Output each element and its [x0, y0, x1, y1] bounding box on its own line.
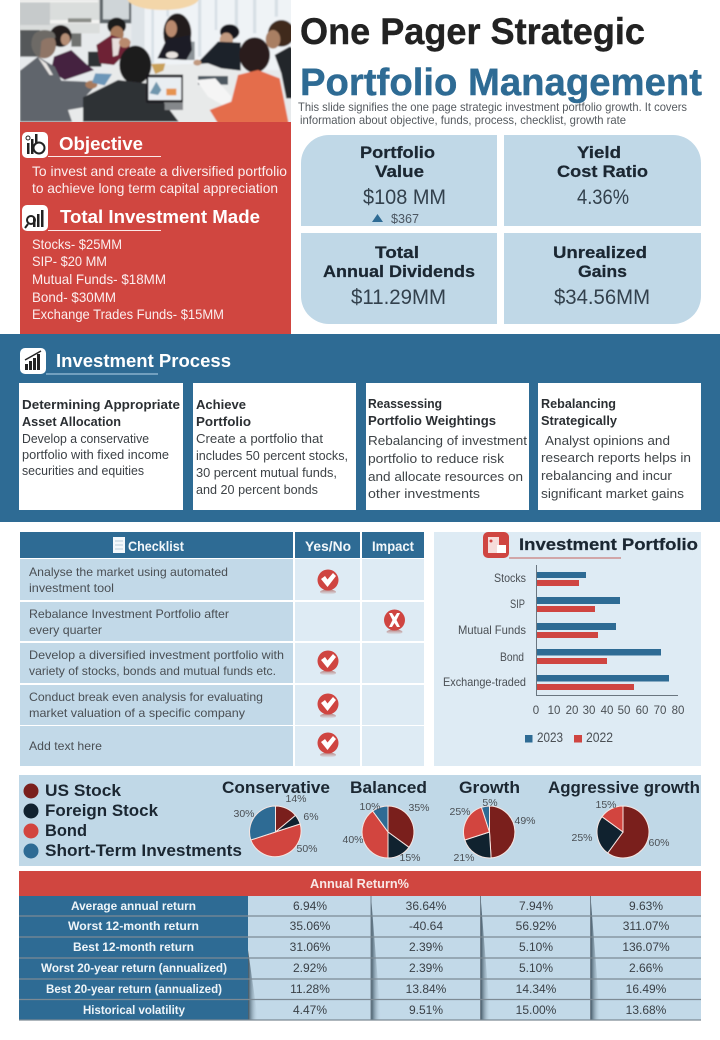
row 3: variety of stocks, bonds and mutual funds etc.	[29, 664, 276, 678]
row labels: Worst 20-year return (annualized)	[41, 961, 227, 975]
text: subtitle description	[298, 100, 687, 127]
bar chart: 50	[618, 705, 630, 717]
pie legend	[24, 781, 242, 860]
text: objective body: To invest and create a diversified portfolio	[32, 163, 287, 179]
pie: growth: Growth	[459, 778, 520, 797]
return values: 2.92%	[293, 961, 327, 975]
card: rebalancing strategically: research reports helps in	[541, 450, 691, 465]
card: asset allocation: Asset Allocation	[22, 414, 121, 429]
return values: 13.68%	[626, 1003, 667, 1017]
row 2: every quarter	[29, 623, 102, 637]
pie: growth: 21%	[453, 852, 475, 864]
return values: 136.07%	[622, 940, 670, 954]
card: asset allocation	[19, 383, 183, 510]
pie legend: Foreign Stock	[45, 801, 159, 820]
KPI: unrealized gains: $34.56MM	[554, 286, 650, 309]
return values: 2.39%	[409, 961, 443, 975]
pie: balanced: 40%	[342, 834, 364, 846]
icon: objective target chart	[22, 132, 48, 158]
pie: conservative: 30%	[233, 808, 255, 820]
KPI: unrealized gains	[504, 233, 701, 324]
heading: investment portfolio: Investment Portfolio	[519, 535, 698, 554]
KPI: yield cost ratio: Cost Ratio	[557, 162, 648, 181]
heading: objective: Objective	[59, 134, 143, 154]
return values: 11.28%	[290, 982, 330, 996]
row labels: Historical volatility	[83, 1003, 185, 1017]
table header labels	[128, 538, 414, 554]
KPI: portfolio value: Value	[375, 162, 424, 181]
KPI: unrealized gains: Unrealized	[553, 243, 647, 262]
card: achieve portfolio: Achieve	[196, 397, 246, 412]
bar chart: 80	[672, 705, 684, 717]
panel: KPI tiles	[301, 135, 701, 324]
KPI: yield cost ratio: 4.36%	[577, 186, 629, 209]
card: reassessing weightings: Reassessing	[368, 396, 442, 411]
return values: 35.06%	[290, 919, 331, 933]
photo: team meeting around a table	[18, 0, 298, 127]
KPI: portfolio value	[301, 135, 497, 226]
table header labels: Impact	[372, 538, 414, 554]
panel: asset mix pies	[19, 775, 701, 866]
card: achieve portfolio: 30 percent mutual funds,	[196, 465, 337, 480]
return values: 14.34%	[516, 982, 557, 996]
bar chart: 10	[548, 705, 560, 717]
row labels	[41, 899, 227, 1017]
return values: 2.66%	[629, 961, 663, 975]
row 5: Add text here	[29, 739, 102, 753]
KPI: unrealized gains: Gains	[578, 262, 627, 281]
KPI: total annual dividends: Total	[375, 243, 419, 262]
icon: portfolio clipboard	[483, 532, 509, 558]
bar chart: 20	[566, 705, 578, 717]
card: achieve portfolio	[193, 383, 356, 510]
pie: aggressive growth: 60%	[648, 837, 670, 849]
pie: aggressive growth: Aggressive growth	[548, 778, 700, 797]
row 2: Rebalance Investment Portfolio after	[29, 607, 229, 621]
pie: conservative: Conservative	[222, 778, 330, 797]
title: Portfolio Management	[300, 62, 702, 104]
pie: aggressive growth: 15%	[595, 799, 617, 811]
text: objective body	[32, 163, 287, 196]
list: investment amounts: SIP- $20 MM	[32, 253, 107, 269]
KPI: portfolio value: Portfolio	[360, 143, 435, 162]
row 2	[20, 602, 424, 641]
pie: growth: 25%	[449, 806, 471, 818]
pie: conservative	[222, 778, 330, 857]
row labels: Best 12-month return	[73, 940, 194, 954]
chart legend: 2023	[537, 729, 563, 745]
text: subtitle description: This slide signifies the one page strategic investment portfolio growth. It covers	[298, 100, 687, 114]
KPI: total annual dividends: Annual Dividends	[323, 262, 475, 281]
card: achieve portfolio: Create a portfolio that	[196, 431, 323, 446]
card: asset allocation: portfolio with fixed income	[22, 448, 169, 462]
row 1: investment tool	[29, 581, 114, 595]
KPI: portfolio value: $108 MM	[363, 186, 446, 209]
bar chart: 40	[601, 705, 613, 717]
list: investment amounts	[32, 236, 224, 322]
title	[300, 11, 702, 104]
KPI: total annual dividends	[301, 233, 497, 324]
row 5	[20, 726, 424, 766]
return values	[290, 899, 670, 1017]
pie: growth	[449, 778, 536, 864]
icon: red cross	[384, 610, 405, 634]
KPI: yield cost ratio	[504, 135, 701, 226]
return values: 5.10%	[519, 961, 553, 975]
return values: 2.39%	[409, 940, 443, 954]
KPI: portfolio value: $367	[391, 211, 419, 226]
card: rebalancing strategically	[538, 383, 701, 510]
pie: growth: 5%	[482, 797, 498, 809]
card: rebalancing strategically: Rebalancing	[541, 396, 616, 411]
text: objective body: to achieve long term capital appreciation	[32, 180, 278, 196]
return values: 16.49%	[626, 982, 667, 996]
title: One Pager Strategic	[300, 11, 645, 52]
row 4: market valuation of a specific company	[29, 706, 245, 720]
pie: aggressive growth: 25%	[571, 832, 593, 844]
card: rebalancing strategically: Strategically	[541, 413, 618, 428]
pie: balanced: 10%	[359, 801, 381, 813]
return values: 5.10%	[519, 940, 553, 954]
card: reassessing weightings: Portfolio Weightings	[368, 413, 496, 428]
card: achieve portfolio: Portfolio	[196, 414, 251, 429]
list: investment amounts: Mutual Funds- $18MM	[32, 271, 166, 287]
icon: process growth chart	[20, 348, 46, 374]
pie: growth: 49%	[514, 815, 536, 827]
bar chart: 0	[533, 705, 539, 717]
card: asset allocation: Develop a conservative	[22, 432, 149, 446]
heading: total investment made: Total Investment Made	[60, 207, 260, 227]
panel: investment process	[0, 334, 720, 522]
return values: 9.51%	[409, 1003, 443, 1017]
bar chart: 70	[654, 705, 666, 717]
row 4	[20, 685, 424, 725]
card: reassessing weightings: and allocate resources on	[368, 469, 523, 484]
return values: 9.63%	[629, 899, 663, 913]
card: achieve portfolio: and 20 percent bonds	[196, 482, 318, 497]
card: reassessing weightings	[366, 383, 529, 510]
pie: balanced: 35%	[408, 802, 430, 814]
table header labels: Yes/No	[305, 538, 351, 554]
pie legend: Bond	[45, 821, 87, 840]
pie: conservative: 50%	[296, 843, 318, 855]
chart legend: 2022	[586, 729, 613, 745]
card: asset allocation: securities and equities	[22, 464, 144, 478]
card: reassessing weightings: portfolio to reduce risk	[368, 451, 505, 466]
row 1	[20, 559, 424, 600]
return values: 4.47%	[293, 1003, 327, 1017]
row 1: Analyse the market using automated	[29, 565, 228, 579]
table: annual return	[19, 871, 701, 1020]
row labels: Average annual return	[71, 899, 196, 913]
list: investment amounts: Bond- $30MM	[32, 289, 116, 305]
card: asset allocation: Determining Appropriate	[22, 397, 180, 412]
return values: 56.92%	[516, 919, 557, 933]
pie: balanced: 15%	[399, 852, 421, 864]
bar chart: 60	[636, 705, 648, 717]
panel: objective and total investment	[20, 122, 291, 334]
return values: 13.84%	[406, 982, 447, 996]
return values: 15.00%	[516, 1003, 557, 1017]
return values: 31.06%	[290, 940, 331, 954]
card: reassessing weightings: Rebalancing of investment	[368, 433, 527, 448]
card: achieve portfolio: includes 50 percent stocks,	[196, 448, 348, 463]
panel: investment portfolio chart	[434, 532, 701, 766]
bar chart: Bond	[500, 650, 524, 664]
table header labels: Checklist	[128, 538, 184, 554]
return values: -40.64	[409, 919, 443, 933]
pie: conservative: 6%	[303, 811, 319, 823]
pie: conservative: 14%	[285, 793, 307, 805]
row labels: Worst 12-month return	[68, 919, 199, 933]
bar chart: Stocks	[494, 571, 526, 585]
list: investment amounts: Stocks- $25MM	[32, 236, 122, 252]
pie legend: Short-Term Investments	[45, 841, 242, 860]
row 3	[20, 643, 424, 683]
pie legend: US Stock	[45, 781, 122, 800]
bar chart: SIP	[510, 597, 525, 611]
bar chart: 30	[583, 705, 595, 717]
text: subtitle description: information about objective, funds, process, checklist, growth rate	[300, 113, 626, 127]
icon: checklist document	[113, 537, 125, 553]
row labels: Best 20-year return (annualized)	[46, 982, 222, 996]
bar chart: Exchange-traded	[443, 675, 526, 689]
chart legend	[525, 729, 613, 745]
bar chart: Mutual Funds	[458, 623, 526, 637]
table title: Annual Return%	[310, 876, 409, 891]
KPI: total annual dividends: $11.29MM	[351, 286, 446, 309]
pie: balanced: Balanced	[350, 778, 427, 797]
bar chart	[443, 565, 684, 717]
pie: aggressive growth	[548, 778, 700, 858]
return values: 311.07%	[623, 919, 670, 933]
icon: investment chart	[22, 205, 48, 231]
card: reassessing weightings: other investments	[368, 486, 481, 501]
list: investment amounts: Exchange Trades Funds- $15MM	[32, 306, 224, 322]
card: rebalancing strategically: significant market gains	[541, 486, 685, 501]
table: checklist	[20, 532, 424, 766]
row 4: Conduct break even analysis for evaluating	[29, 690, 263, 704]
return values: 36.64%	[406, 899, 447, 913]
pie: balanced	[342, 778, 430, 864]
KPI: yield cost ratio: Yield	[577, 143, 621, 162]
card: rebalancing strategically: rebalancing and incur	[541, 468, 673, 483]
return values: 6.94%	[293, 899, 327, 913]
card: rebalancing strategically: Analyst opinions and	[545, 433, 670, 448]
row 3: Develop a diversified investment portfolio with	[29, 648, 284, 662]
heading: investment process: Investment Process	[56, 351, 231, 371]
return values: 7.94%	[519, 899, 553, 913]
column shadows	[248, 896, 600, 1020]
